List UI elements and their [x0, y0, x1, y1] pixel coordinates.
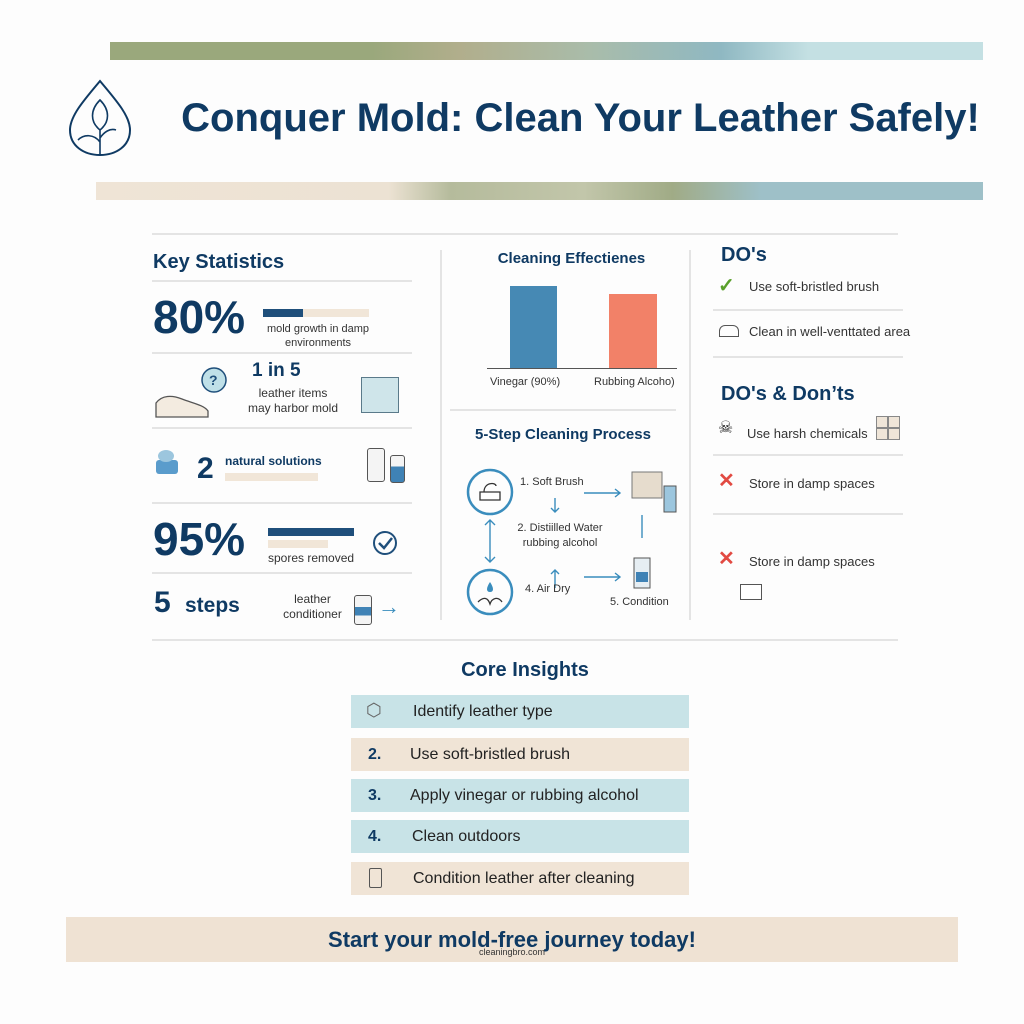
- panel: dos and donts: [713, 244, 910, 600]
- dont item: Store in damp spaces: [749, 476, 875, 491]
- stat: 1 in 5: may harbor mold: [248, 401, 338, 415]
- do item: Use soft-bristled brush: [749, 279, 879, 294]
- chart: cleaning effectiveness: Cleaning Effectienes: [498, 250, 645, 267]
- insight row 5: [351, 862, 689, 895]
- stat: 2 natural solutions: [156, 448, 405, 485]
- stat: 5 steps: →: [378, 594, 400, 619]
- do item: ✓: [718, 275, 735, 297]
- panel: dos and donts: DO's & Don’ts: [721, 383, 855, 405]
- dont item: ☠: [718, 418, 733, 437]
- panel: 5-step cleaning process: 5. Condition: [610, 596, 669, 608]
- panel: core insights: Core Insights: [461, 659, 589, 681]
- insight row 1: [351, 695, 689, 728]
- insight row 5: Condition leather after cleaning: [413, 870, 634, 887]
- stat: 1 in 5: leather items: [259, 386, 327, 400]
- stat: 2 natural solutions: 2: [197, 452, 214, 485]
- icon: leaf drop logo: [69, 80, 131, 156]
- dont item: [718, 470, 875, 492]
- stat: 2 natural solutions: natural solutions: [225, 454, 322, 468]
- heading: key statistics: Key Statistics: [153, 251, 284, 273]
- panel: 5-step cleaning process: [466, 426, 676, 616]
- stat: 80%: [153, 291, 369, 349]
- stat: 5 steps: steps: [185, 594, 240, 617]
- stat: 5 steps: leather conditioner: [283, 592, 342, 621]
- insight row 4: Clean outdoors: [412, 828, 521, 845]
- panel: 5-step cleaning process: 5-Step Cleaning Process: [475, 426, 651, 443]
- chart: cleaning effectiveness: [487, 250, 677, 388]
- insight row 1: ⬡: [366, 700, 382, 720]
- insight row 2: [351, 738, 689, 771]
- panel: key statistics: [152, 251, 412, 625]
- dont item: Use harsh chemicals: [747, 426, 868, 441]
- footer banner: [66, 917, 958, 962]
- dont item: [718, 548, 875, 600]
- insight row 3: [351, 779, 689, 812]
- insight row 3: 3.: [368, 787, 381, 804]
- top decorative band: [110, 42, 983, 60]
- insight row 3: Apply vinegar or rubbing alcohol: [410, 787, 639, 804]
- dont item: [718, 416, 900, 441]
- stat: 1 in 5: ?: [209, 372, 218, 388]
- bottom decorative band: [96, 182, 983, 200]
- panel: 5-step cleaning process: 4. Air Dry: [525, 583, 570, 595]
- insight row 4: 4.: [368, 828, 381, 845]
- insight row 1: Identify leather type: [413, 703, 553, 720]
- stat: 95%: [153, 513, 397, 565]
- footer banner: Start your mold-free journey today!: [328, 927, 696, 952]
- panel: 5-step cleaning process: 1. Soft Brush: [520, 476, 584, 488]
- stat: 1 in 5: 1 in 5: [252, 360, 301, 381]
- panel: dos and donts: DO's: [721, 244, 767, 266]
- dont item: Store in damp spaces: [749, 554, 875, 569]
- panel: 5-step cleaning process: 2. Distiilled Water rubbing alcohol: [517, 522, 603, 549]
- footer banner: cleaningbro.com: [479, 947, 545, 957]
- stat: 95%: 95%: [153, 513, 245, 565]
- stat: 80%: mold growth in damp environments: [267, 323, 369, 349]
- insight row 4: [351, 820, 689, 853]
- stat: 5 steps: 5: [154, 586, 171, 619]
- title: Conquer Mold: Clean Your Leather Safely!: [181, 96, 980, 140]
- insight row 2: Use soft-bristled brush: [410, 746, 570, 763]
- chart: cleaning effectiveness: Vinegar (90%): [490, 376, 560, 388]
- insight row 2: 2.: [368, 746, 381, 763]
- dont item: ✕: [718, 470, 735, 492]
- stat: 95%: spores removed: [268, 551, 354, 565]
- stat: 80%: 80%: [153, 291, 245, 343]
- do item: Clean in well-venttated area: [749, 324, 910, 339]
- chart: cleaning effectiveness: Rubbing Alcoho): [594, 376, 675, 388]
- do item: [718, 275, 879, 297]
- dont item: ✕: [718, 548, 735, 570]
- stat: 5 steps: [154, 586, 400, 625]
- stat: 1 in 5: [155, 360, 399, 418]
